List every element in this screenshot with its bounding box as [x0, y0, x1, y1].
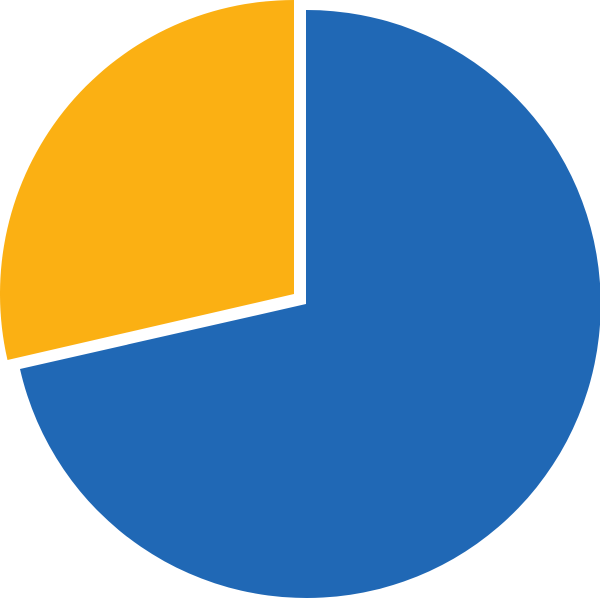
slice: small orange segment — [0, 0, 294, 360]
